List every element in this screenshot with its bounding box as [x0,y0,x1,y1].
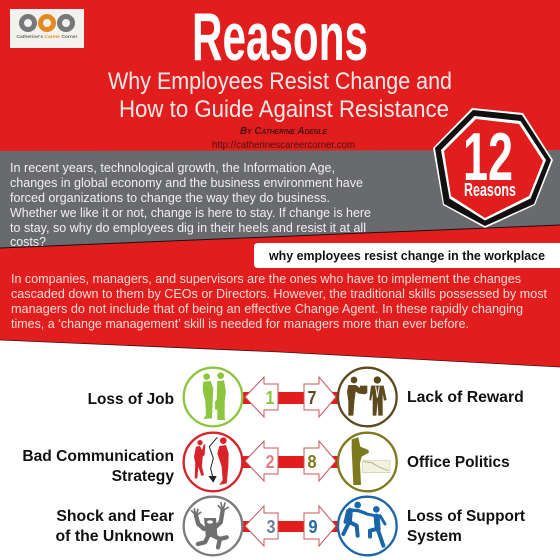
byline: By Catherine Adenle [240,125,327,137]
label: office politics: Office Politics [407,454,510,471]
body paragraph: times, a ‘change management’ skill is needed for managers more than ever before. [11,316,469,331]
arrows row 1 [243,377,338,417]
arrows row 1: 1 [266,388,274,408]
arrows row 3: 9 [308,517,318,537]
intro paragraph: changes in global economy and the business environment have [10,175,363,190]
body paragraph: managers do not include that of being an effective Change Agent. In these rapidly changing [11,301,523,316]
label: shock and fear: Shock and Fear [56,508,174,525]
icon: loss of job [184,368,242,426]
arrows row 3 [243,506,338,546]
icon: lack of reward [338,368,397,426]
logo [10,9,84,48]
intro paragraph [10,160,371,249]
body paragraph: cascaded down to them by CEOs or Directors. However, the traditional skills possessed by most [11,286,547,301]
label: shock and fear [56,508,174,545]
badge: 12 reasons: 12 [463,119,513,195]
label: bad communication strategy: Strategy [112,468,174,485]
label: loss of support: Loss of Support [407,508,525,525]
subtitle: Why Employees Resist Change and [108,68,452,95]
arrows row 3: 3 [266,517,276,537]
intro paragraph: costs? [10,234,46,249]
arrows row 1: 7 [308,388,316,408]
icon: office politics [338,433,397,491]
label: shock and fear: of the Unknown [56,528,174,545]
title: Reasons [192,0,368,75]
url: http://catherinescareercorner.com [212,139,355,151]
label: bad communication strategy [22,448,174,485]
label: loss of support [407,508,525,545]
badge: 12 reasons [433,108,553,228]
subtitle: How to Guide Against Resistance [119,96,449,123]
banner: why employees resist [254,243,560,268]
panel: grey intro band [0,150,560,248]
logo: Catherine's Career Corner [16,34,78,39]
icon: loss of support [338,497,397,555]
badge: 12 reasons: Reasons [464,180,516,200]
label: loss of job: Loss of Job [88,391,174,408]
banner: why employees resist: why employees resist change in the workplace [268,248,545,263]
arrows row 2: 2 [266,452,274,472]
icon: bad communication [184,433,242,491]
icon: shock and fear [184,497,242,555]
body paragraph [11,271,547,331]
arrows row 2 [243,441,338,481]
background: red header band [0,0,560,367]
arrows row 2: 8 [308,452,316,472]
label: loss of support: System [407,528,462,545]
body paragraph: In companies, managers, and supervisors are the ones who have to implement the changes [11,271,521,286]
label: bad communication strategy: Bad Communication [22,448,174,465]
intro paragraph: Whether we like it or not, change is here to stay. If change is here [10,205,371,220]
intro paragraph: to stay, so why do employees dig in their heels and resist it at all [10,220,366,235]
intro paragraph: In recent years, technological growth, the Information Age, [10,160,335,175]
subtitle [108,68,452,123]
intro paragraph: forced organizations to change the way they do business. [10,190,330,205]
label: lack of reward: Lack of Reward [407,389,524,406]
